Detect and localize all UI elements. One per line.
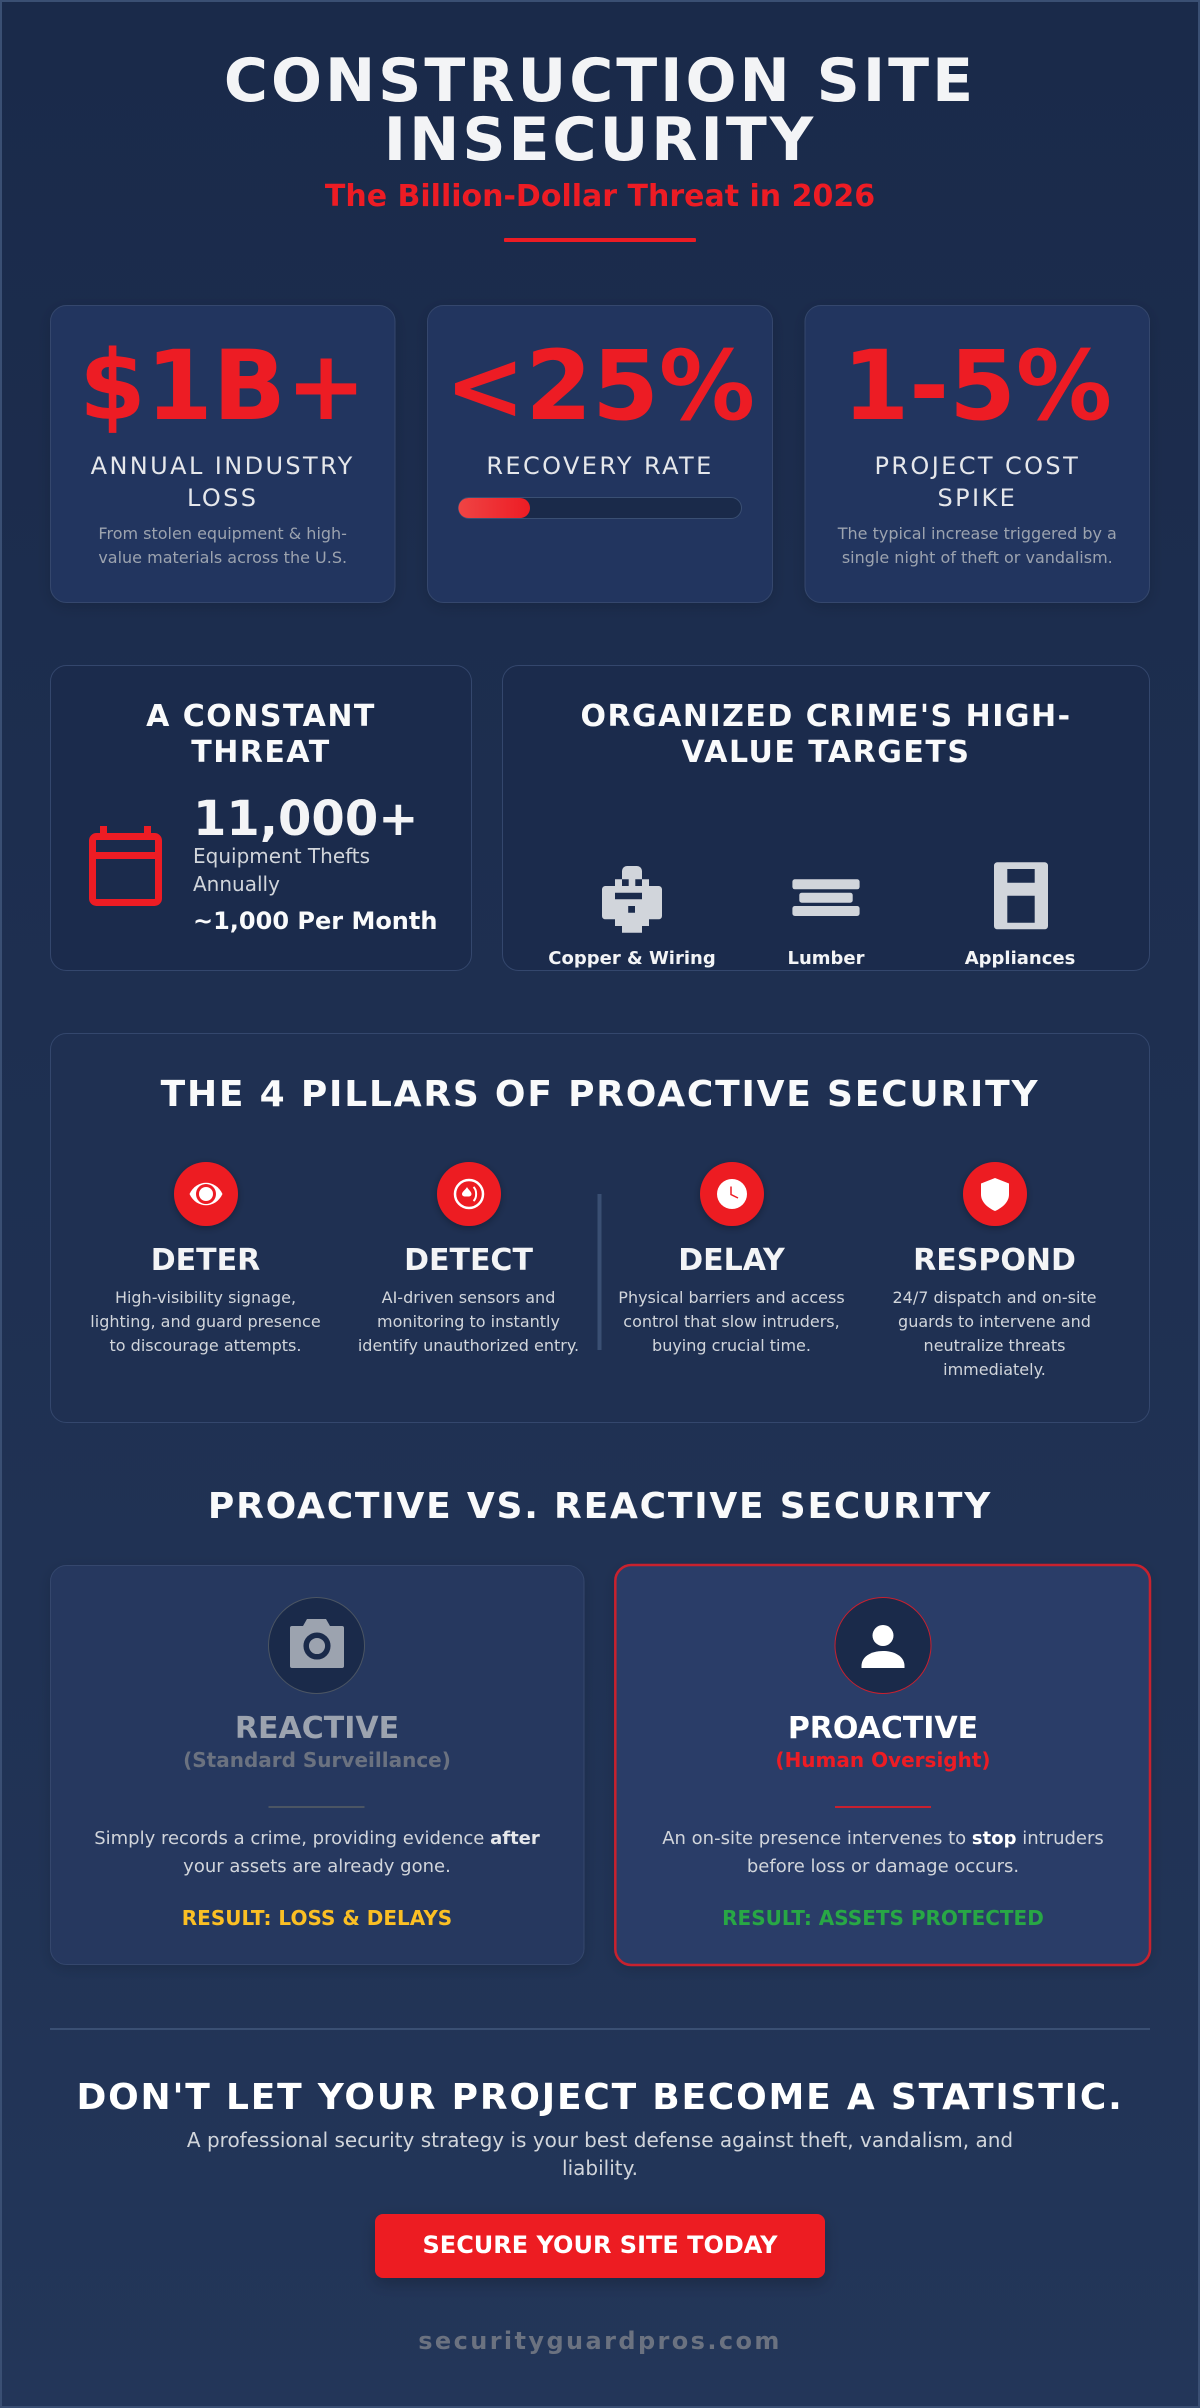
- panel: the 4 pillars: [50, 1034, 1150, 1422]
- pillar: delay: [618, 1162, 845, 1355]
- icon: sensor: [437, 1162, 501, 1226]
- pillar description: buying crucial time.: [652, 1336, 811, 1355]
- heading: A CONSTANT: [146, 699, 376, 734]
- label: appliances: Appliances: [965, 948, 1075, 969]
- comparison heading: PROACTIVE VS. REACTIVE SECURITY: [208, 1486, 992, 1527]
- icon: camera: [268, 1598, 364, 1694]
- heading: PROACTIVE: [788, 1711, 978, 1746]
- heading: THE 4 PILLARS OF PROACTIVE SECURITY: [161, 1074, 1039, 1115]
- title underline: [504, 238, 696, 242]
- stat label: PROJECT COST: [874, 452, 1080, 480]
- result: RESULT: ASSETS PROTECTED: [722, 1906, 1044, 1930]
- stat description: value materials across the U.S.: [98, 548, 347, 567]
- heading: VALUE TARGETS: [682, 735, 970, 770]
- pillar description: AI-driven sensors and: [382, 1288, 555, 1307]
- subtitle: The Billion-Dollar Threat in 2026: [325, 179, 875, 214]
- stat value: 1-5%: [842, 330, 1112, 442]
- heading: THREAT: [191, 735, 331, 770]
- pillar: detect: [358, 1162, 579, 1355]
- pillar title: DETECT: [404, 1243, 533, 1278]
- description: your assets are already gone.: [183, 1856, 451, 1877]
- pillar description: monitoring to instantly: [377, 1312, 560, 1331]
- title: INSECURITY: [384, 105, 816, 175]
- call to action text: A professional security strategy is your best defense against theft, vandalism, and: [187, 2128, 1013, 2152]
- call to action text: liability.: [562, 2156, 638, 2180]
- stat label: SPIKE: [937, 484, 1017, 512]
- icon: appliances: [994, 862, 1048, 929]
- subheading: (Standard Surveillance): [183, 1748, 451, 1772]
- stat description: From stolen equipment & high-: [98, 524, 347, 543]
- pillar: respond: [892, 1162, 1096, 1379]
- pillar description: 24/7 dispatch and on-site: [892, 1288, 1096, 1307]
- stat description: single night of theft or vandalism.: [842, 548, 1113, 567]
- monthly rate: ~1,000 Per Month: [193, 907, 437, 935]
- pillar title: RESPOND: [913, 1243, 1076, 1278]
- icon: calendar: [92, 826, 159, 902]
- call to action heading: DON'T LET YOUR PROJECT BECOME A STATISTIC.: [76, 2077, 1124, 2118]
- pillar description: guards to intervene and: [898, 1312, 1091, 1331]
- pillar description: identify unauthorized entry.: [358, 1336, 579, 1355]
- panel: recovery rate stat: [428, 306, 772, 602]
- panel: project cost spike stat: [805, 306, 1150, 602]
- subheading: (Human Oversight): [775, 1748, 991, 1772]
- button: SECURE YOUR SITE TODAY: [423, 2231, 778, 2259]
- progress bar: [458, 498, 742, 518]
- section divider: [50, 2028, 1150, 2030]
- button: [375, 2214, 825, 2278]
- divider: [598, 1194, 602, 1350]
- pillar title: DELAY: [678, 1243, 786, 1278]
- rule: [268, 1806, 364, 1808]
- icon: eye: [174, 1162, 238, 1226]
- stat caption: Annually: [193, 872, 280, 896]
- header: [224, 46, 976, 242]
- pillar description: neutralize threats: [924, 1336, 1065, 1355]
- pillar description: High-visibility signage,: [115, 1288, 296, 1307]
- pillar: deter: [90, 1162, 321, 1355]
- stat value: 11,000+: [193, 791, 418, 847]
- label: copper and wiring: Copper & Wiring: [548, 948, 716, 969]
- description: Simply records a crime, providing evidence after: [94, 1828, 540, 1849]
- icon: person: [835, 1598, 931, 1694]
- title: CONSTRUCTION SITE: [224, 46, 976, 116]
- description: before loss or damage occurs.: [747, 1856, 1019, 1877]
- pillar description: control that slow intruders,: [623, 1312, 840, 1331]
- panel: a constant threat: [50, 666, 472, 970]
- heading: ORGANIZED CRIME'S HIGH-: [580, 699, 1072, 734]
- stat label: RECOVERY RATE: [486, 452, 714, 480]
- panel: reactive: [50, 1566, 584, 1964]
- stat caption: Equipment Thefts: [193, 844, 370, 868]
- stat label: ANNUAL INDUSTRY: [91, 452, 355, 480]
- stat label: LOSS: [187, 484, 258, 512]
- label: lumber: Lumber: [787, 948, 865, 969]
- pillar description: to discourage attempts.: [110, 1336, 301, 1355]
- description: An on-site presence intervenes to stop intruders: [662, 1828, 1104, 1849]
- heading: REACTIVE: [235, 1711, 399, 1746]
- icon: shield: [963, 1162, 1027, 1226]
- pillar title: DETER: [151, 1243, 260, 1278]
- rule: [835, 1806, 931, 1808]
- panel: proactive: [615, 1565, 1150, 1965]
- pillar description: Physical barriers and access: [618, 1288, 845, 1307]
- icon: copper and wiring: [602, 866, 662, 933]
- panel: high-value targets: [502, 666, 1150, 970]
- stat description: The typical increase triggered by a: [837, 524, 1117, 543]
- panel: annual industry loss stat: [50, 306, 395, 602]
- stat value: $1B+: [79, 330, 366, 442]
- stat value: <25%: [445, 330, 755, 442]
- icon: lumber: [792, 879, 860, 916]
- website: securityguardpros.com: [418, 2327, 782, 2355]
- pillar description: immediately.: [943, 1360, 1046, 1379]
- result: RESULT: LOSS & DELAYS: [182, 1906, 452, 1930]
- pillar description: lighting, and guard presence: [90, 1312, 321, 1331]
- icon: clock: [700, 1162, 764, 1226]
